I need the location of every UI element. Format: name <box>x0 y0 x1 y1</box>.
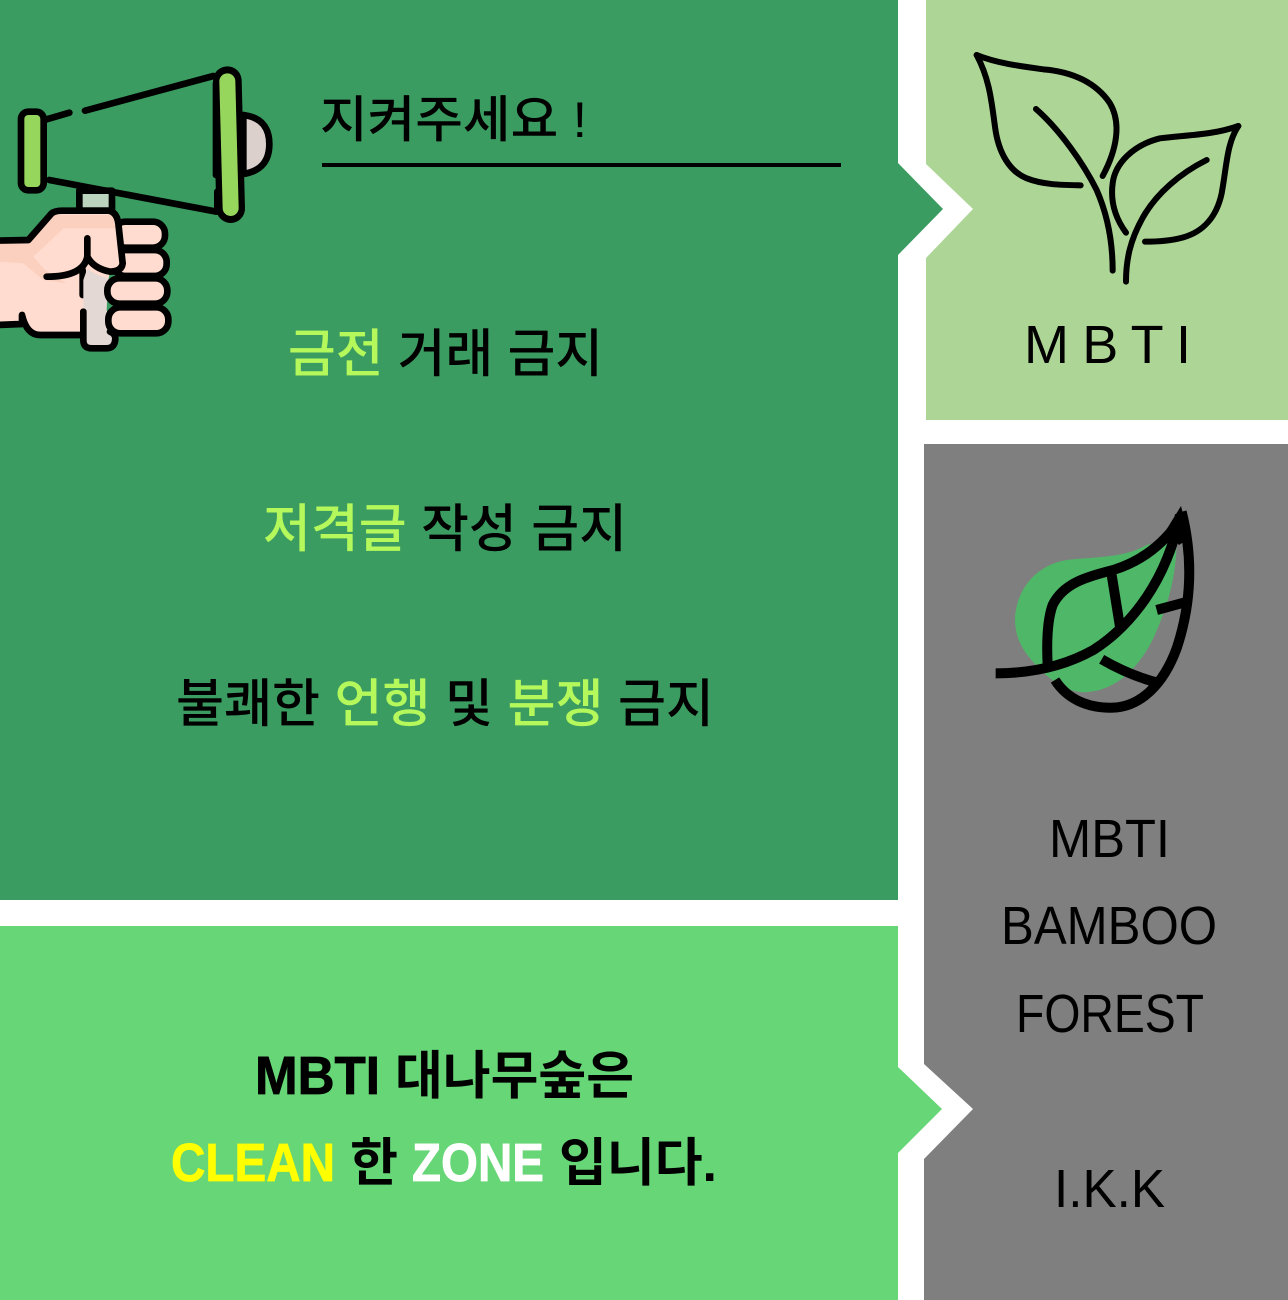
closing line two: ZONE <box>412 1133 544 1193</box>
label: MBTI bamboo forest: MBTI <box>1049 809 1170 869</box>
thumb outline <box>83 312 115 348</box>
leaf colour blob <box>1015 538 1177 692</box>
icon: sprout <box>977 55 1238 282</box>
label: MBTI bamboo forest <box>1001 809 1217 1044</box>
hand shading <box>0 215 115 283</box>
title underline <box>322 163 841 167</box>
label: author: I.K.K <box>1054 1159 1165 1219</box>
closing line two: 한 <box>350 1135 398 1193</box>
rule: no unpleasant speech: 불쾌한 언행 및 분쟁 금지 <box>176 676 714 734</box>
megaphone back <box>243 115 269 174</box>
title: 지켜주세요 ! <box>320 92 587 148</box>
leaf outline <box>996 512 1189 708</box>
megaphone rear bar <box>21 112 44 190</box>
lower fingers <box>107 278 167 304</box>
rule: no money trading: 금전 거래 금지 <box>288 326 603 384</box>
hand outline <box>0 211 123 335</box>
closing line two <box>171 1133 717 1193</box>
closing line two: 입니다. <box>559 1135 717 1193</box>
panel: MBTI <box>926 0 1288 420</box>
megaphone front bar outline <box>227 81 231 209</box>
icon: leaf <box>996 506 1189 708</box>
closing line one <box>255 1046 634 1106</box>
megaphone cone <box>47 76 217 212</box>
icon: megaphone and fist <box>0 76 269 348</box>
megaphone front bar fill <box>227 81 231 208</box>
closing line two: CLEAN <box>171 1133 335 1193</box>
closing line one: 대나무숲은 <box>395 1048 634 1106</box>
thumb <box>83 268 115 348</box>
label: MBTI: M B T I <box>1024 315 1191 375</box>
fingers <box>113 222 165 248</box>
handle <box>79 191 112 211</box>
panel: rules <box>0 0 943 900</box>
leaf tip <box>1160 506 1189 545</box>
label: MBTI bamboo forest: FOREST <box>1016 984 1204 1044</box>
closing line one: MBTI <box>255 1046 380 1106</box>
hand <box>0 211 123 333</box>
panel: clean zone <box>0 926 942 1300</box>
panel: bamboo forest <box>924 444 1288 1300</box>
label: MBTI bamboo forest: BAMBOO <box>1001 896 1217 956</box>
rule: no slander: 저격글 작성 금지 <box>263 501 627 559</box>
